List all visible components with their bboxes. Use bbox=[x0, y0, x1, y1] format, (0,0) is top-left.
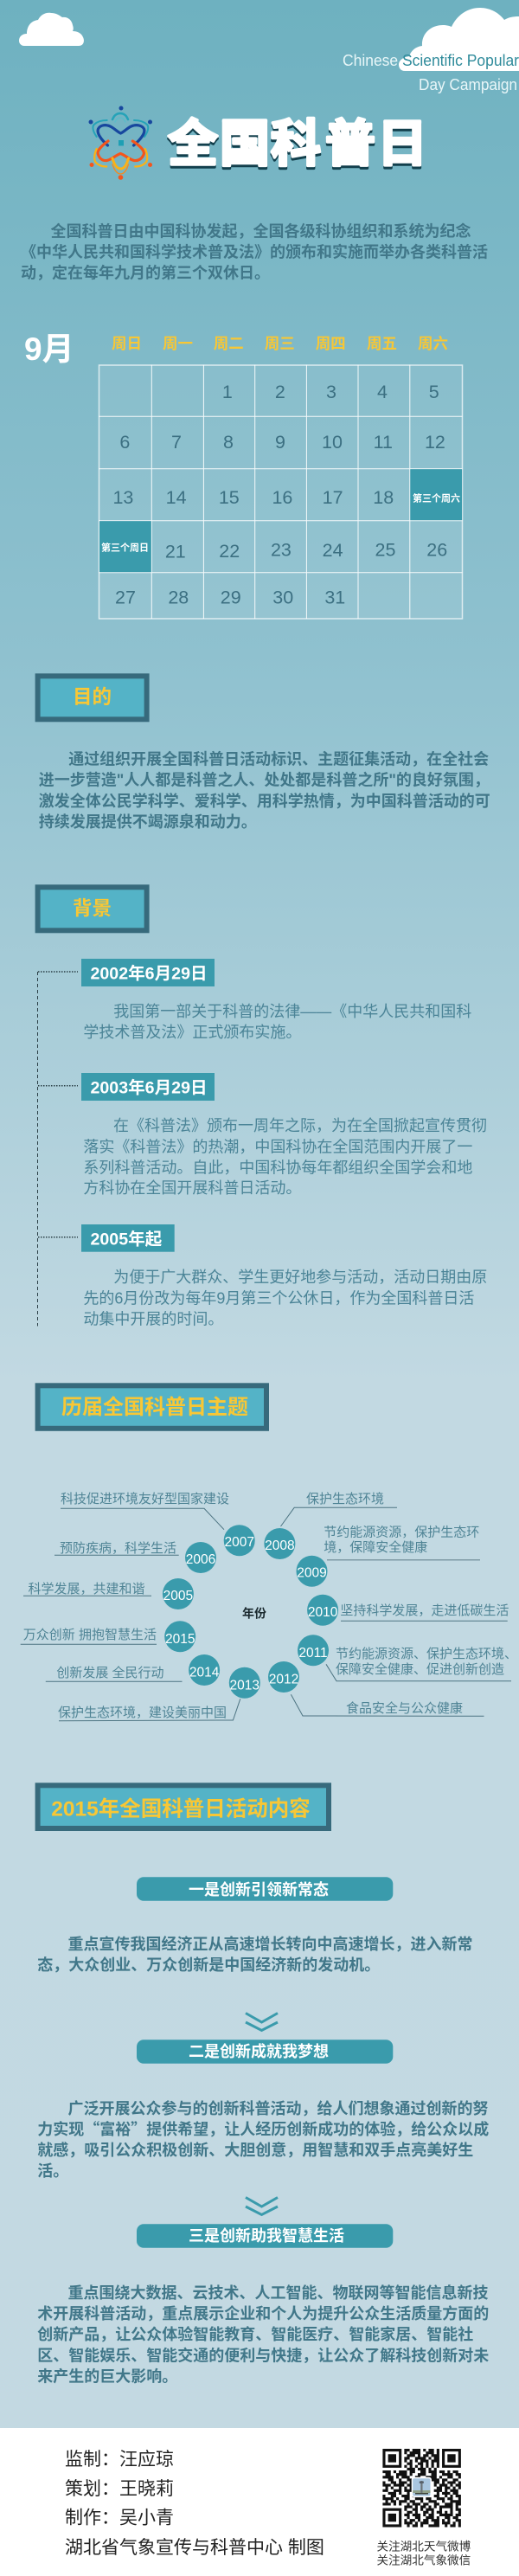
year 2006: 预防疾病，科学生活 bbox=[60, 1541, 176, 1556]
calendar dates: 12 bbox=[425, 432, 445, 453]
purpose paragraph: 激发全体公民学科学、爱科学、用科学热情，为中国科普活动的可 bbox=[39, 792, 490, 810]
weekday header: 周日 bbox=[112, 335, 142, 352]
purpose paragraph: 通过组织开展全国科普日活动标识、主题征集活动，在全社会 bbox=[68, 749, 489, 768]
year 2013: 2013 bbox=[230, 1679, 260, 1693]
calendar bbox=[24, 331, 463, 619]
year 2012: 2012 bbox=[269, 1672, 298, 1687]
pill heading bbox=[137, 1877, 393, 1901]
paragraph: 创新产品，让公众体验智能教育、智能医疗、智能家居、智能社 bbox=[37, 2325, 473, 2343]
timeline: 2003: 在《科普法》颁布一周年之际，为在全国掀起宣传贯彻 bbox=[113, 1117, 487, 1134]
year 2008: 保护生态环境 bbox=[306, 1491, 384, 1506]
calendar dates: 23 bbox=[271, 540, 292, 561]
english subtitle: Chinese Scientific Popular bbox=[343, 52, 519, 69]
leader lines bbox=[21, 1507, 511, 1721]
paragraph: 来产生的巨大影响。 bbox=[37, 2367, 177, 2385]
calendar dates: 6 bbox=[119, 432, 130, 453]
paragraph: 态，大众创业、万众创新是中国经济新的发动机。 bbox=[37, 1956, 380, 1974]
timeline: 2005: 为便于广大群众、学生更好地参与活动，活动日期由原 bbox=[113, 1269, 487, 1286]
credits: 湖北省气象宣传与科普中心 制图 bbox=[65, 2538, 324, 2558]
intro paragraph: 《中华人民共和国科学技术普及法》的颁布和实施而举办各类科普活 bbox=[21, 242, 488, 261]
highlight: third Sunday bbox=[99, 521, 151, 572]
year 2005 bbox=[28, 1578, 194, 1609]
timeline: 2003 bbox=[81, 1073, 487, 1197]
highlight: third Saturday bbox=[410, 469, 462, 520]
timeline: 2003: 2003年6月29日 bbox=[90, 1078, 208, 1098]
activity three bbox=[37, 2224, 489, 2385]
QR center image bbox=[412, 2477, 432, 2497]
paragraph: 就感，吸引公众积极创新、大胆创意，用智慧和双手点亮美好生 bbox=[37, 2141, 473, 2159]
title: 全国科普日 bbox=[168, 106, 427, 178]
highlight: third Saturday: 第三个周六 bbox=[413, 491, 460, 504]
year 2007: 2007 bbox=[224, 1535, 254, 1550]
heading: background: 背景 bbox=[73, 898, 112, 919]
pill heading bbox=[137, 2224, 393, 2248]
heading: past themes bbox=[38, 1385, 266, 1429]
weekday header: 周二 bbox=[214, 335, 244, 352]
intro paragraph bbox=[21, 222, 488, 282]
calendar grid bbox=[99, 365, 463, 619]
year 2007: 科技促进环境友好型国家建设 bbox=[61, 1491, 229, 1506]
calendar dates: 17 bbox=[323, 487, 343, 508]
timeline: 2002: 2002年6月29日 bbox=[90, 964, 208, 984]
calendar dates: 22 bbox=[219, 541, 240, 562]
arrow: double chevron bbox=[246, 2198, 278, 2215]
pill heading: 三是创新助我智慧生活 bbox=[189, 2226, 344, 2245]
calendar dates: 18 bbox=[373, 487, 394, 508]
paragraph bbox=[37, 1935, 473, 1974]
title: 全国科普日 bbox=[168, 103, 427, 176]
paragraph bbox=[37, 2099, 489, 2180]
year 2009: 节约能源资源，保护生态环 bbox=[324, 1525, 479, 1539]
weekday header bbox=[112, 335, 448, 352]
year 2009: 境，保障安全健康 bbox=[324, 1539, 427, 1555]
year 2005: 2005 bbox=[163, 1589, 193, 1603]
timeline connector bbox=[38, 972, 78, 1326]
paragraph: 力实现“富裕”提供希望，让人经历创新成功的体验，给公众以成 bbox=[37, 2117, 489, 2140]
year 2013 bbox=[58, 1667, 260, 1720]
credits: 策划：王晓莉 bbox=[65, 2479, 174, 2499]
year 2008: 2008 bbox=[265, 1539, 295, 1553]
heading: purpose bbox=[38, 676, 147, 719]
year 2007 bbox=[61, 1491, 255, 1556]
heading: 2015 activities bbox=[38, 1785, 329, 1828]
year 2015: 万众创新 拥抱智慧生活 bbox=[23, 1627, 157, 1642]
english subtitle: Chinese Scientific Popular bbox=[343, 52, 519, 69]
calendar dates: 7 bbox=[171, 432, 182, 453]
footer panel bbox=[0, 2428, 519, 2576]
credits: 制作：吴小青 bbox=[65, 2508, 174, 2528]
heading: purpose: 目的 bbox=[73, 686, 112, 708]
arrow: double chevron bbox=[246, 2013, 278, 2030]
timeline: 2003: 方科协在全国开展科普日活动。 bbox=[83, 1179, 301, 1197]
timeline: 2003: 系列科普活动。自此，中国科协每年都组织全国学会和地 bbox=[83, 1160, 472, 1177]
weekday header: 周六 bbox=[418, 335, 448, 352]
month label: 9月 bbox=[24, 331, 74, 367]
themes radial diagram bbox=[21, 1491, 517, 1721]
calendar dates: 25 bbox=[375, 540, 395, 561]
paragraph: 术开展科普活动，重点展示企业和个人为提升公众生活质量方面的 bbox=[37, 2304, 489, 2322]
year 2009 bbox=[296, 1525, 479, 1587]
credits bbox=[65, 2450, 324, 2558]
icon: QR code bbox=[382, 2449, 461, 2527]
heading: background bbox=[38, 887, 147, 930]
paragraph: 广泛开展公众参与的创新科普活动，给人们想象通过创新的努 bbox=[67, 2099, 488, 2117]
thick leader line bbox=[327, 1559, 480, 1561]
timeline: 2002 bbox=[81, 959, 471, 1041]
timeline: 2002: 学技术普及法》正式颁布实施。 bbox=[83, 1024, 301, 1041]
year 2012 bbox=[268, 1661, 463, 1716]
timeline: 2002: 我国第一部关于科普的法律——《中华人民共和国科 bbox=[113, 1003, 471, 1020]
year 2010 bbox=[307, 1595, 509, 1626]
year 2006: 2006 bbox=[186, 1552, 215, 1567]
timeline: 2005 bbox=[81, 1224, 487, 1327]
year 2006 bbox=[60, 1541, 216, 1573]
weekday header: 周一 bbox=[163, 335, 193, 352]
calendar dates: 2 bbox=[275, 382, 285, 402]
timeline: 2005: 先的6月份改为每年9月第三个公休日，作为全国科普日活 bbox=[83, 1289, 474, 1307]
year 2012: 食品安全与公众健康 bbox=[346, 1700, 463, 1716]
calendar dates: 11 bbox=[374, 432, 393, 453]
icon: right cloud bbox=[399, 8, 519, 71]
weekday header: 周四 bbox=[316, 335, 346, 352]
heading: past themes: 历届全国科普日主题 bbox=[61, 1396, 248, 1419]
pill heading bbox=[137, 2040, 393, 2064]
calendar dates: 27 bbox=[115, 587, 136, 607]
heading: 2015 activities: 2015年全国科普日活动内容 bbox=[51, 1796, 311, 1821]
year 2015 bbox=[23, 1621, 195, 1652]
pill heading: 一是创新引领新常态 bbox=[189, 1880, 329, 1898]
english subtitle bbox=[343, 52, 519, 93]
year 2011: 保障安全健康、促进创新创造 bbox=[336, 1661, 504, 1677]
QR caption bbox=[377, 2539, 471, 2566]
year 2015: 2015 bbox=[165, 1632, 195, 1647]
timeline: 2005: 动集中开展的时间。 bbox=[83, 1310, 223, 1327]
year 2009: 2009 bbox=[297, 1566, 327, 1580]
paragraph: 重点宣传我国经济正从高速增长转向中高速增长，进入新常 bbox=[67, 1935, 472, 1953]
calendar dates: 26 bbox=[426, 540, 447, 561]
calendar dates: 14 bbox=[166, 487, 187, 508]
paragraph: 重点围绕大数据、云技术、人工智能、物联网等智能信息新技 bbox=[67, 2284, 488, 2302]
weekday header: 周三 bbox=[265, 335, 295, 352]
pill heading: 二是创新成就我梦想 bbox=[189, 2042, 329, 2060]
center label: 年份 bbox=[242, 1606, 266, 1620]
calendar dates: 28 bbox=[168, 587, 189, 607]
calendar dates: 29 bbox=[221, 587, 241, 607]
year 2011 bbox=[298, 1635, 517, 1677]
year 2010: 坚持科学发展，走进低碳生活 bbox=[340, 1603, 509, 1618]
calendar dates: 31 bbox=[324, 587, 345, 607]
calendar dates: 9 bbox=[275, 432, 285, 453]
calendar dates: 3 bbox=[326, 382, 336, 402]
paragraph bbox=[37, 2284, 489, 2385]
calendar dates: 16 bbox=[272, 487, 292, 508]
year 2010: 2010 bbox=[308, 1605, 338, 1620]
calendar dates: 5 bbox=[429, 382, 439, 402]
QR caption: 关注湖北气象微信 bbox=[377, 2554, 471, 2566]
calendar dates: 4 bbox=[377, 382, 388, 402]
calendar dates: 13 bbox=[112, 487, 133, 508]
icon: science day logo bbox=[88, 106, 152, 180]
intro paragraph: 动，定在每年九月的第三个双休日。 bbox=[21, 263, 270, 282]
calendar dates: 8 bbox=[223, 432, 234, 453]
year 2014: 2014 bbox=[189, 1665, 220, 1680]
year 2014 bbox=[56, 1654, 220, 1686]
calendar dates: 21 bbox=[165, 542, 186, 562]
timeline: 2003: 落实《科普法》的热潮，中国科协在全国范围内开展了一 bbox=[83, 1139, 472, 1156]
weekday header: 周五 bbox=[367, 335, 397, 352]
purpose paragraph bbox=[39, 749, 490, 831]
year 2005: 科学发展，共建和谐 bbox=[28, 1582, 145, 1596]
calendar dates: 30 bbox=[272, 587, 293, 607]
intro paragraph: 全国科普日由中国科协发起，全国各级科协组织和系统为纪念 bbox=[50, 222, 471, 241]
credits: 监制：汪应琼 bbox=[65, 2450, 174, 2470]
paragraph: 活。 bbox=[37, 2162, 68, 2180]
QR caption: 关注湖北天气微博 bbox=[377, 2539, 471, 2553]
calendar dates: 24 bbox=[323, 540, 343, 561]
timeline: 2005: 2005年起 bbox=[90, 1230, 163, 1249]
english subtitle: Day Campaign bbox=[419, 76, 517, 93]
year 2013: 保护生态环境，建设美丽中国 bbox=[58, 1705, 227, 1720]
icon: left cloud bbox=[19, 13, 84, 46]
purpose paragraph: 持续发展提供不竭源泉和动力。 bbox=[39, 813, 257, 831]
year 2008 bbox=[264, 1491, 384, 1559]
year 2014: 创新发展 全民行动 bbox=[56, 1665, 164, 1680]
year 2011: 节约能源资源、保护生态环境、 bbox=[336, 1646, 517, 1661]
purpose paragraph: 进一步营造"人人都是科普之人、处处都是科普之所"的良好氛围， bbox=[39, 770, 490, 789]
calendar dates: 15 bbox=[219, 487, 240, 508]
paragraph: 区、智能娱乐、智能交通的便利与快捷，让公众了解科技创新对未 bbox=[37, 2347, 489, 2364]
activity one bbox=[37, 1877, 473, 1974]
activity two bbox=[37, 2040, 489, 2180]
calendar dates bbox=[112, 382, 447, 607]
calendar dates: 10 bbox=[322, 432, 343, 453]
highlight: third Sunday: 第三个周日 bbox=[101, 542, 149, 554]
year 2011: 2011 bbox=[298, 1646, 328, 1661]
calendar dates: 1 bbox=[222, 382, 233, 402]
